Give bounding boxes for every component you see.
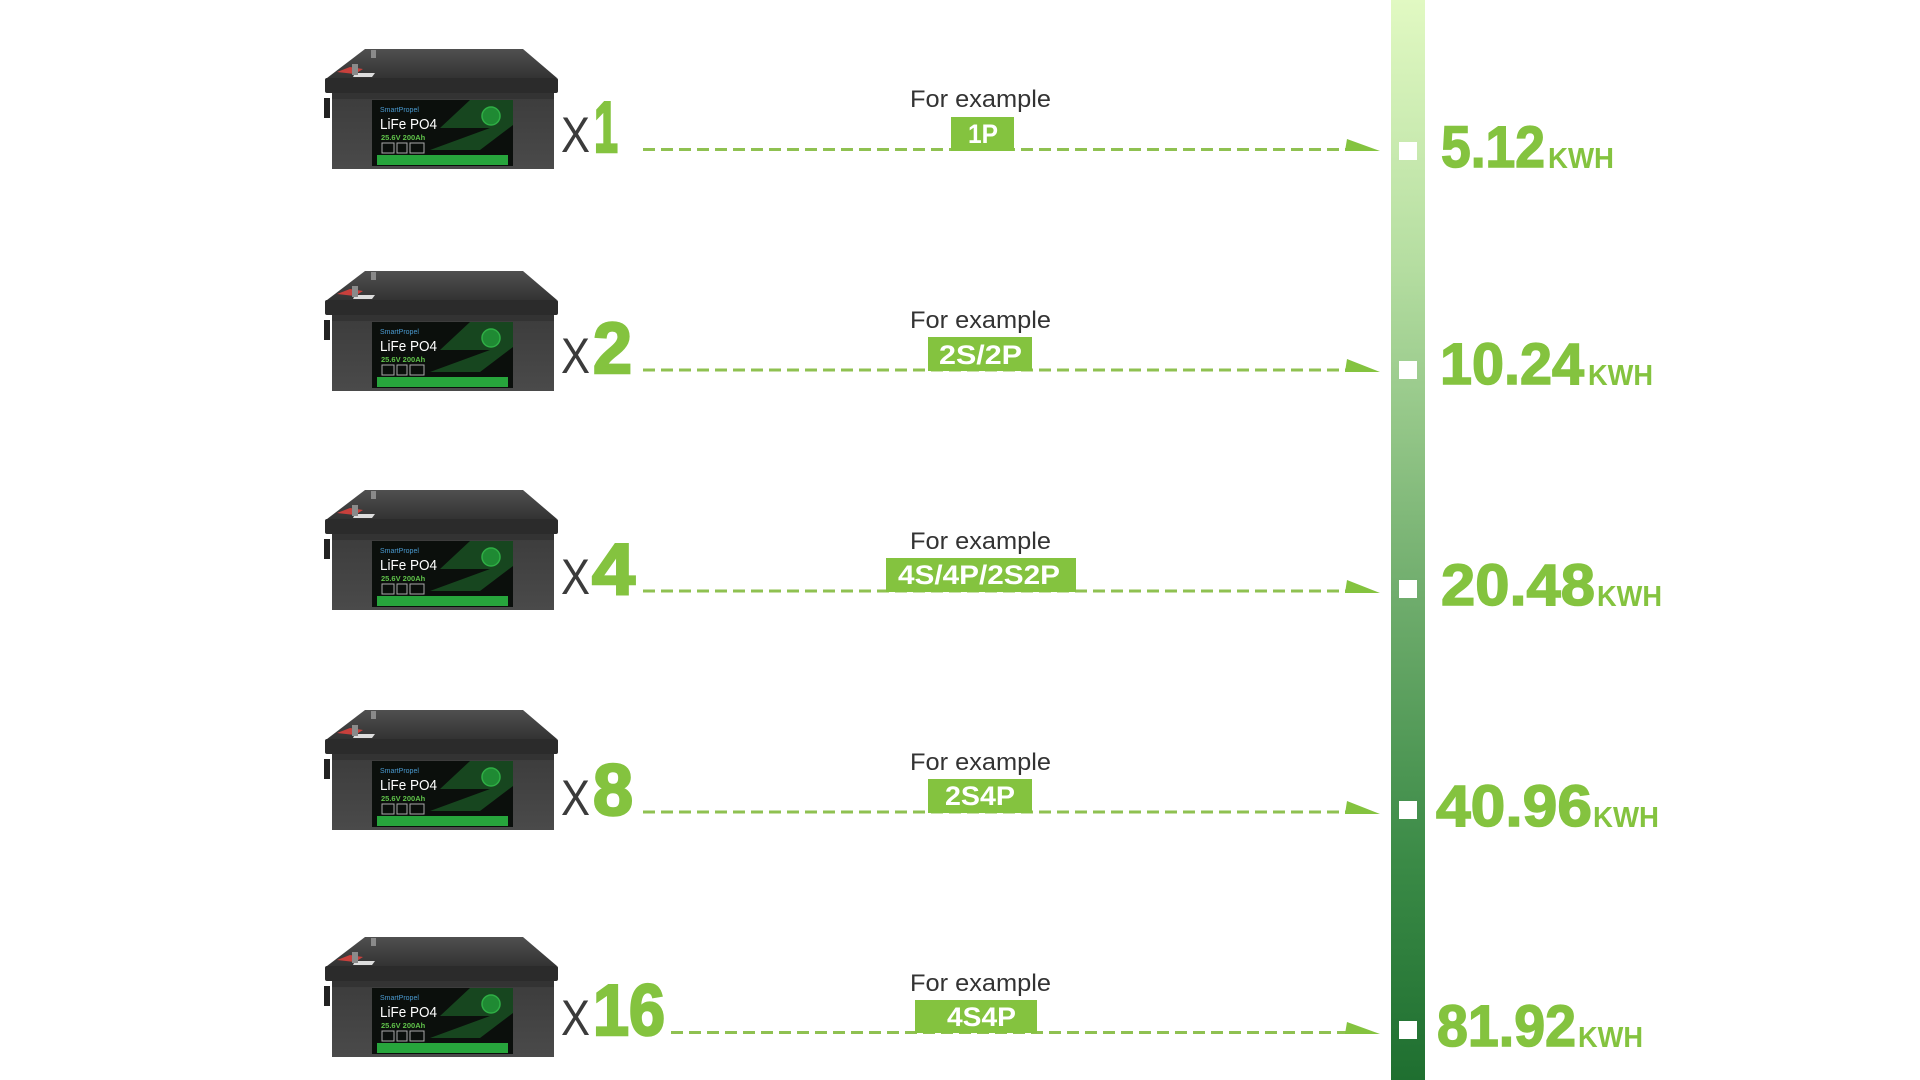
battery image row 5: SmartPropel	[380, 995, 419, 1002]
example label row 4: For example	[910, 749, 1051, 776]
multiplier row 2: 2	[593, 309, 632, 389]
capacity value row 5: 81.92	[1437, 994, 1576, 1059]
marker row 3	[1399, 580, 1417, 598]
multiplier row 5	[561, 971, 665, 1051]
capacity value row 4: KWH	[1593, 802, 1659, 834]
example label row 2	[910, 307, 1051, 371]
battery image row 1: 25.6V 200Ah	[381, 133, 426, 142]
capacity value row 2	[1440, 332, 1653, 397]
battery image row 2: 25.6V 200Ah	[381, 355, 426, 364]
capacity value row 3: 20.48	[1441, 553, 1595, 618]
multiplier row 3: 4	[592, 530, 635, 610]
capacity value row 5: KWH	[1578, 1022, 1643, 1054]
marker row 2	[1399, 361, 1417, 379]
gradient capacity scale bar	[1391, 0, 1425, 1080]
row 4: eight batteries, 2S4P, 40.96 kWh	[324, 710, 1659, 839]
battery image row 3: LiFe PO4	[380, 557, 437, 574]
battery image row 4: 25.6V 200Ah	[381, 794, 426, 803]
example label row 5: For example	[910, 970, 1051, 997]
multiplier row 2: X	[561, 328, 590, 384]
example label row 1	[910, 86, 1051, 151]
capacity value row 4: 40.96	[1436, 774, 1592, 839]
dashed arrow row 3	[643, 580, 1380, 593]
battery image row 3: SmartPropel	[380, 548, 419, 555]
capacity value row 1: 5.12	[1441, 115, 1545, 180]
battery image row 3	[324, 490, 558, 610]
multiplier row 1	[561, 88, 618, 168]
example label row 4: 2S4P	[945, 781, 1015, 811]
dashed arrow row 5	[671, 1022, 1380, 1034]
dashed arrow row 1	[643, 139, 1380, 151]
capacity value row 3	[1441, 553, 1662, 618]
battery image row 2	[324, 271, 558, 391]
example label row 1: 1P	[968, 119, 998, 149]
row 5: sixteen batteries, 4S4P, 81.92 kWh	[324, 937, 1643, 1059]
example label row 1: For example	[910, 86, 1051, 113]
battery image row 2: LiFe PO4	[380, 338, 437, 355]
battery image row 2: SmartPropel	[380, 329, 419, 336]
multiplier row 1: X	[561, 107, 590, 163]
battery image row 5: 25.6V 200Ah	[381, 1021, 426, 1030]
multiplier row 5: X	[561, 990, 590, 1046]
example label row 3	[886, 528, 1076, 592]
capacity value row 1: KWH	[1548, 143, 1614, 175]
battery image row 3: 25.6V 200Ah	[381, 574, 426, 583]
battery image row 4: LiFe PO4	[380, 777, 437, 794]
capacity value row 1	[1441, 115, 1614, 180]
multiplier row 5: 16	[593, 971, 665, 1051]
example label row 5	[910, 970, 1051, 1033]
multiplier row 1: 1	[594, 88, 618, 168]
row 2: two batteries, 2S/2P, 10.24 kWh	[324, 271, 1653, 397]
multiplier row 2	[561, 309, 632, 389]
marker row 1	[1399, 142, 1417, 160]
battery image row 1: SmartPropel	[380, 107, 419, 114]
dashed arrow row 4	[643, 801, 1380, 814]
multiplier row 4: 8	[593, 751, 633, 831]
battery image row 1	[324, 49, 558, 169]
example label row 5: 4S4P	[947, 1002, 1016, 1032]
battery image row 4	[324, 710, 558, 830]
marker row 5	[1399, 1021, 1417, 1039]
capacity value row 4	[1436, 774, 1659, 839]
battery image row 1: LiFe PO4	[380, 116, 437, 133]
dashed arrow row 2	[643, 359, 1380, 372]
example label row 3: For example	[910, 528, 1051, 555]
battery image row 5	[324, 937, 558, 1057]
multiplier row 3	[561, 530, 635, 610]
example label row 2: For example	[910, 307, 1051, 334]
row 3: four batteries, 4S/4P/2S2P, 20.48 kWh	[324, 490, 1662, 618]
capacity value row 2: KWH	[1588, 360, 1653, 392]
capacity value row 3: KWH	[1597, 581, 1662, 613]
battery image row 4: SmartPropel	[380, 768, 419, 775]
row 1: one battery, 1P, 5.12 kWh	[324, 49, 1614, 180]
multiplier row 3: X	[561, 549, 590, 605]
example label row 4	[910, 749, 1051, 813]
battery image row 5: LiFe PO4	[380, 1004, 437, 1021]
multiplier row 4	[561, 751, 633, 831]
multiplier row 4: X	[561, 770, 590, 826]
example label row 2: 2S/2P	[939, 340, 1022, 370]
marker row 4	[1399, 801, 1417, 819]
example label row 3: 4S/4P/2S2P	[898, 560, 1060, 590]
capacity value row 2: 10.24	[1440, 332, 1584, 397]
